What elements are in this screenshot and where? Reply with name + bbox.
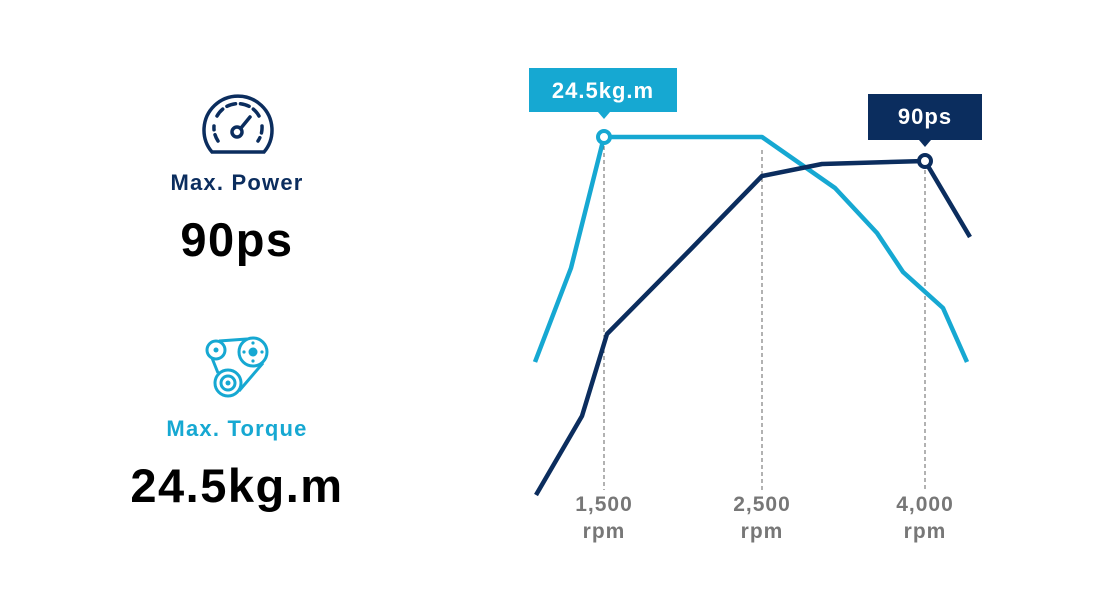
callout: power: 90ps [898, 104, 952, 129]
axis labels: rpm [904, 520, 946, 543]
axis labels: 4,000 [896, 493, 954, 516]
value: 90ps: 90ps [180, 213, 294, 266]
heading: max torque: Max. Torque [166, 416, 308, 441]
icon: speedometer [202, 94, 274, 154]
axis labels: 1,500 [575, 493, 633, 516]
axis labels: rpm [741, 520, 783, 543]
callout: torque: 24.5kg.m [552, 78, 654, 103]
value: 24.5kg.m: 24.5kg.m [130, 459, 344, 512]
power line [536, 155, 970, 495]
axis labels: rpm [583, 520, 625, 543]
axis labels [575, 493, 954, 543]
icon: belt pulleys [206, 336, 268, 398]
torque line [535, 131, 967, 362]
heading: max power: Max. Power [170, 170, 304, 195]
axis labels: 2,500 [733, 493, 791, 516]
callout: power [868, 94, 982, 147]
callout: torque [529, 68, 677, 119]
